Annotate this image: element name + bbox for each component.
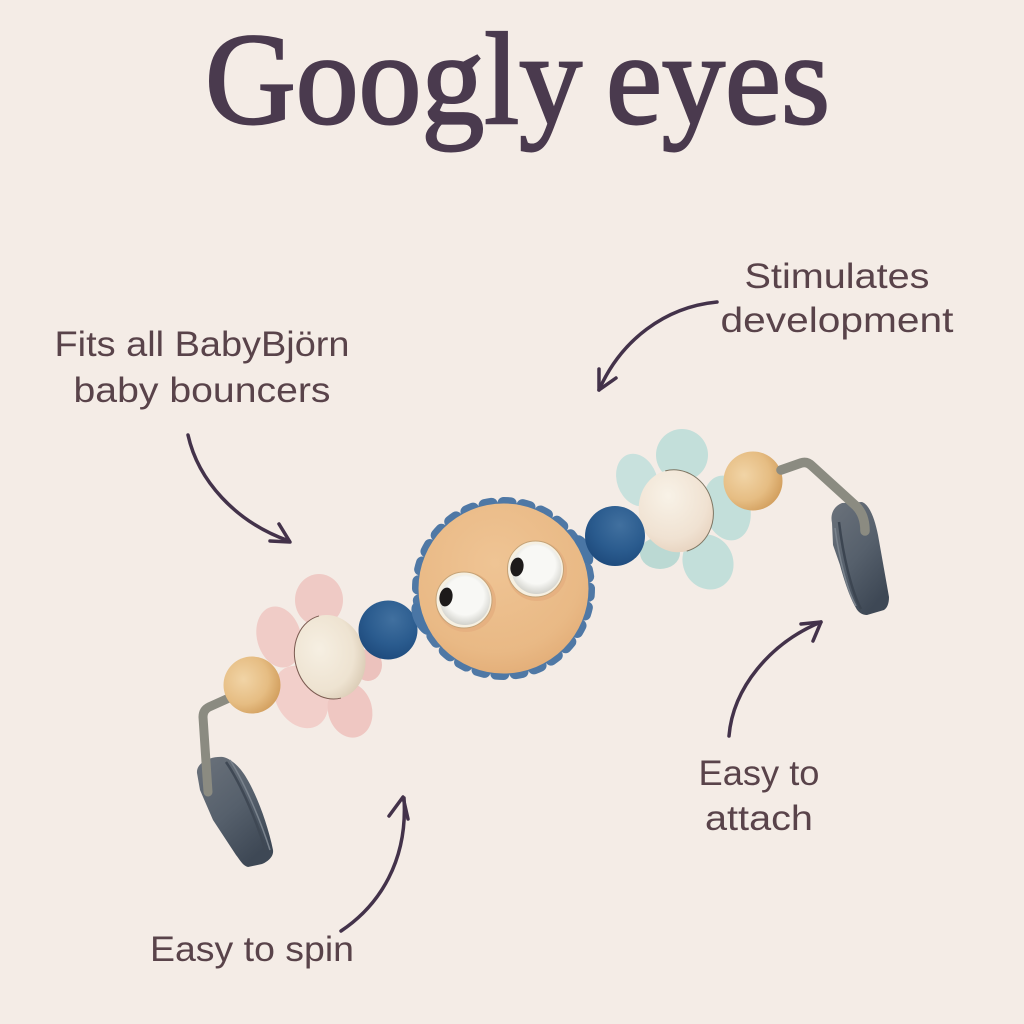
label: fits all bouncers [54, 325, 350, 410]
toy: left clip and arm [197, 698, 273, 867]
toy: left pink flower [250, 574, 382, 743]
title: Googly [205, 7, 582, 152]
googly eye left [436, 572, 492, 628]
wooden knob, right flower [630, 461, 722, 561]
toy: right mint flower [609, 429, 758, 598]
label: stimulates development [720, 257, 954, 340]
label: easy to attach: Easy to [698, 754, 820, 793]
toy: left blue bead [358, 600, 418, 660]
arrow: to right flower [599, 302, 717, 390]
label: stimulates development: Stimulates [744, 257, 930, 296]
wooden knob, left flower [285, 607, 375, 707]
arrow: to right clip [729, 622, 821, 736]
toy: right wooden bead [724, 452, 782, 510]
googly eye right [508, 541, 564, 597]
arrow: to spinner [341, 797, 408, 931]
toy: right blue bead [585, 506, 645, 566]
toy: central spinner with googly eyes [407, 502, 597, 674]
label: fits all bouncers: Fits all BabyBjörn [54, 325, 350, 364]
label: stimulates development: development [720, 301, 954, 340]
toy: right clip and arm [781, 462, 889, 615]
label: easy to attach [698, 754, 820, 838]
label: easy to spin: Easy to spin [150, 930, 354, 969]
label: fits all bouncers: baby bouncers [74, 371, 330, 410]
title: eyes [606, 7, 830, 152]
title [205, 7, 830, 152]
toy: left wooden bead [224, 656, 280, 714]
arrow: to left flower [188, 435, 290, 542]
label: easy to attach: attach [705, 799, 813, 838]
